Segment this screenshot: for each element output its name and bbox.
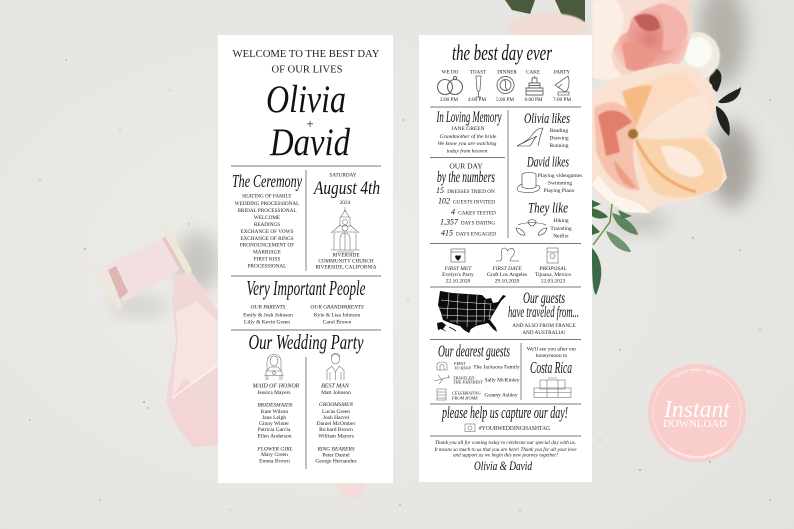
names: Olivia + David: Olivia — [266, 78, 346, 121]
panel: David likes: David likes — [526, 155, 569, 171]
icon: ring box — [547, 248, 558, 263]
panel: very important people: Emily & Josh Johnson — [243, 312, 293, 318]
panel: our wedding party: Peter Daniel — [322, 452, 350, 458]
title: WELCOME TO THE BEST DAY — [232, 49, 380, 60]
title: OF OUR LIVES — [272, 64, 343, 76]
icon: camera — [465, 424, 475, 432]
panel: they like: Netflix — [553, 232, 569, 240]
panel: thank you note: and support as we begin this new journey together! — [453, 452, 558, 458]
panel: Olivia likes: Running — [550, 143, 569, 149]
panel: they like: Hiking — [553, 218, 569, 224]
panel: our day by the numbers: by the numbers — [437, 169, 495, 186]
panel: our day by the numbers: GUESTS INVITED — [453, 200, 495, 206]
panel: our wedding party: Lucas Green — [322, 409, 350, 415]
panel: thank you note: It means so much to us that you are here! Thank you for all your love — [434, 446, 577, 453]
panel: our wedding party: RING BEARERS — [316, 446, 355, 452]
panel: date and venue: RIVERSIDE, CALIFORNIA — [315, 264, 377, 270]
panel: first met, first date, proposal: Graft Los Angeles — [487, 271, 527, 278]
icon: house — [437, 389, 446, 400]
panel: our dearest guests: FROM HOME — [451, 396, 478, 400]
panel: our wedding party: FLOWER GIRL — [256, 446, 293, 452]
panel: the ceremony: EXCHANGE OF RINGS — [240, 236, 294, 242]
icon: heart line — [496, 248, 519, 261]
title — [232, 49, 380, 76]
panel: the ceremony: PROCESSIONAL — [248, 264, 286, 270]
panel: our wedding party: BRIDESMAIDS — [257, 403, 293, 409]
panel: the ceremony: FIRST KISS — [254, 257, 280, 263]
panel: honeymoon — [527, 346, 576, 398]
panel: the ceremony: PRONOUNCEMENT OF — [240, 243, 294, 249]
badge: instant download — [648, 364, 746, 462]
icon: cake — [526, 76, 543, 95]
panel: thank you note: Thank you all for coming today to celebrate our special day with us. — [435, 439, 576, 446]
panel: our wedding party: Jane Leigh — [262, 415, 286, 421]
panel: very important people: Lilly & Kevin Green — [244, 320, 290, 326]
panel: the ceremony: BRIDAL PROCESSIONAL — [237, 208, 297, 214]
panel: David likes: Swimming — [548, 181, 572, 187]
panel: date and venue: COMMUNITY CHURCH — [318, 259, 374, 265]
panel: our wedding party: Richard Brown — [319, 427, 353, 433]
timeline: DINNER — [497, 69, 517, 75]
panel: thank you note: Olivia & David — [474, 458, 532, 473]
icon: airplane — [434, 375, 450, 384]
icon: gramophone — [555, 76, 569, 95]
timeline: 6:00 PM — [524, 97, 543, 103]
panel: guests map: Our guests — [523, 290, 565, 307]
panel: first met, first date, proposal: Tijuana, Mexico — [535, 272, 571, 278]
panel: David likes: Playing videogames — [538, 173, 582, 179]
icon: rings — [438, 76, 462, 94]
icon: church — [331, 207, 360, 252]
panel: date and venue: August 4th — [312, 178, 380, 199]
panel: our wedding party: Jessica Mayers — [257, 390, 291, 396]
icon: maid of honor — [264, 354, 284, 380]
photo prop: ribbon end below program — [335, 483, 366, 498]
panel: our wedding party: Daniel McOmber — [317, 421, 355, 427]
panel: the ceremony: WELCOME — [254, 215, 280, 221]
panel: first met, first date, proposal: 22.10.2020 — [446, 278, 471, 284]
panel: our dearest guests: THE FARTHEST — [453, 380, 483, 384]
panel: date and venue: SATURDAY — [329, 172, 357, 178]
timeline: WE DO — [442, 69, 459, 75]
panel: David likes: Playing Piano — [544, 188, 575, 194]
panel: guests map: AND AUSTRALIA! — [522, 330, 566, 336]
panel: our day by the numbers: 4 — [451, 207, 455, 216]
panel: our day by the numbers: CAKES TESTED — [458, 210, 496, 216]
photo: flowers and leaves — [505, 0, 741, 295]
panel: the ceremony: SEATING OF FAMILY — [242, 194, 292, 200]
icon: suitcases — [534, 378, 571, 398]
badge: instant download: DOWNLOAD — [663, 419, 727, 430]
panel: our wedding party: Ginny Winter — [259, 421, 289, 427]
map: USA — [437, 291, 506, 333]
panel: the ceremony — [232, 171, 302, 270]
panel: our wedding party: Kate Wilson — [261, 409, 288, 415]
icon: calendar heart — [451, 249, 465, 262]
panel: our wedding party: George Hernandez — [315, 459, 357, 465]
panel: our wedding party: William Mayers — [318, 433, 354, 439]
panel: our wedding party: Mary Green — [261, 452, 288, 458]
panel: date and venue — [312, 172, 380, 270]
icon: champagne flute — [476, 76, 481, 97]
panel: our wedding party: Ellen Anderson — [257, 433, 292, 439]
panel: in loving memory: JANE GREEN — [451, 126, 485, 132]
panel: Olivia likes: Drawing — [549, 136, 569, 142]
panel: our dearest guests: The Jacksons Family — [473, 364, 520, 370]
panel: guests map: AND ALSO FROM FRANCE — [512, 323, 576, 329]
panel: our wedding party: Patricia Garcia — [258, 427, 291, 433]
panel: our wedding party: GROOMSMEN — [319, 402, 353, 408]
panel: in loving memory: Grandmother of the bride — [440, 133, 497, 140]
icon: high heel — [517, 128, 543, 146]
panel: very important people: OUR PARENTS — [251, 305, 286, 311]
panel: the ceremony: EXCHANGE OF VOWS — [241, 229, 294, 235]
panel: they like: Traveling — [550, 226, 572, 232]
badge: instant download: Instant — [663, 397, 731, 423]
names: Olivia + David: + — [306, 116, 314, 131]
panel: our wedding party: Matt Johnson — [321, 390, 351, 396]
panel: Olivia likes — [517, 111, 570, 149]
panel: our dearest guests: Our dearest guests — [438, 342, 510, 360]
icon: mailbox — [437, 362, 447, 370]
panel: first met, first date, proposal: 29.10.2020 — [495, 278, 520, 284]
panel: our wedding party: BEST MAN — [321, 384, 350, 390]
panel: guests map — [437, 290, 579, 336]
timeline: TOAST — [470, 69, 487, 75]
panel: in loving memory: We know you are watching — [438, 141, 497, 147]
panel: our day by the numbers: 102 — [438, 197, 450, 206]
panel: our day by the numbers: 415 — [441, 228, 453, 237]
panel: our dearest guests: Sally McKinley — [485, 378, 520, 384]
panel: honeymoon: Costa Rica — [530, 358, 572, 377]
panel: our wedding party: Our Wedding Party — [248, 330, 364, 354]
panel: the ceremony: WEDDING PROCESSIONAL — [235, 201, 299, 207]
panel: honeymoon: honeymoon to — [536, 353, 568, 359]
panel: Olivia likes: Reading — [550, 128, 568, 134]
panel: our dearest guests — [434, 342, 520, 400]
names: Olivia + David: David — [269, 121, 350, 164]
panel: our dearest guests: FIRST — [453, 361, 466, 366]
icon: best man — [327, 353, 344, 380]
program card: right — [419, 35, 592, 482]
panel: our dearest guests: TO RSVP — [454, 366, 471, 370]
icon: doves with heart — [516, 220, 547, 235]
panel: first met, first date, proposal: Evelyn's Party — [442, 272, 474, 278]
panel: date and venue: RIVERSIDE — [332, 253, 360, 259]
names: Olivia + David — [266, 78, 350, 164]
panel: in loving memory: today from heaven — [447, 148, 488, 155]
panel: very important people: Carol Brown — [323, 320, 352, 326]
panel: our wedding party: Emma Brown — [259, 458, 290, 464]
panel: first met, first date, proposal: PROPOSAL — [538, 266, 567, 272]
panel: they like — [516, 200, 572, 240]
panel: in loving memory — [436, 109, 502, 155]
panel: our day by the numbers: 15 — [436, 186, 444, 195]
panel: hashtag — [441, 403, 568, 432]
program card: left — [218, 35, 393, 483]
timeline: 7:00 PM — [553, 97, 571, 103]
panel: first met, first date, proposal: 12.03.2023 — [541, 278, 566, 284]
panel: our day by the numbers: 1,357 — [440, 218, 459, 227]
panel: Olivia likes: Olivia likes — [524, 111, 570, 127]
timeline: CAKE — [526, 69, 540, 75]
panel: our dearest guests: CELEBRATING — [452, 390, 481, 396]
panel: very important people: Kyle & Lisa Johnson — [314, 312, 361, 318]
timeline: 4:00 PM — [468, 97, 486, 103]
panel: date and venue: 2024 — [340, 200, 351, 206]
panel: our day by the numbers: OUR DAY — [449, 161, 483, 170]
panel: the ceremony: READINGS — [254, 222, 280, 228]
panel: hashtag: please help us capture our day! — [441, 403, 568, 422]
panel: very important people — [243, 276, 366, 326]
icon: plate — [497, 76, 514, 94]
panel: first met, first date, proposal: FIRST DATE — [491, 266, 522, 272]
panel: our dearest guests: Granny Ashley — [484, 392, 518, 398]
timeline — [438, 69, 571, 103]
panel: our day by the numbers — [436, 161, 496, 237]
panel: guests map: have traveled from... — [508, 304, 579, 321]
panel: our wedding party — [248, 330, 364, 465]
panel: David likes — [518, 155, 582, 194]
panel: they like: They like — [528, 200, 568, 216]
panel: thank you note — [434, 439, 577, 473]
panel: our day by the numbers: DAYS DATING — [461, 221, 495, 227]
panel: honeymoon: We'll see you after our — [527, 346, 576, 353]
panel: in loving memory: In Loving Memory — [436, 109, 502, 126]
panel: our wedding party: MAID OF HONOR — [252, 384, 300, 390]
heading: the best day ever: the best day ever — [452, 40, 552, 65]
timeline: 2:00 PM — [440, 97, 458, 103]
panel: hashtag: #YOURWEDDINGHASHTAG — [479, 426, 551, 432]
photo prop: silk ribbon spool — [95, 229, 219, 447]
panel: first met, first date, proposal: FIRST MET — [444, 266, 472, 272]
panel: first met, first date, proposal — [442, 248, 571, 284]
panel: very important people: OUR GRANDPARENTS — [310, 305, 364, 311]
badge: instant download: LOVE · EDIT · PRINT — [676, 369, 718, 378]
panel: the ceremony: The Ceremony — [232, 171, 302, 191]
panel: our day by the numbers: DAYS ENGAGED — [456, 231, 496, 237]
icon: top hat — [518, 172, 540, 193]
panel: the ceremony: MARRIAGE — [253, 250, 281, 256]
timeline: PARTY — [554, 69, 570, 75]
panel: our dearest guests: TRAVELED — [453, 376, 475, 380]
panel: our day by the numbers: DRESSES TRIED ON — [447, 189, 495, 195]
panel: our wedding party: Josh Harvel — [323, 415, 350, 421]
badge: instant download: NO PRINTED ITEMS SHIPPED — [669, 447, 724, 459]
timeline: 5:00 PM — [496, 97, 514, 103]
panel: very important people: Very Important People — [246, 276, 366, 300]
